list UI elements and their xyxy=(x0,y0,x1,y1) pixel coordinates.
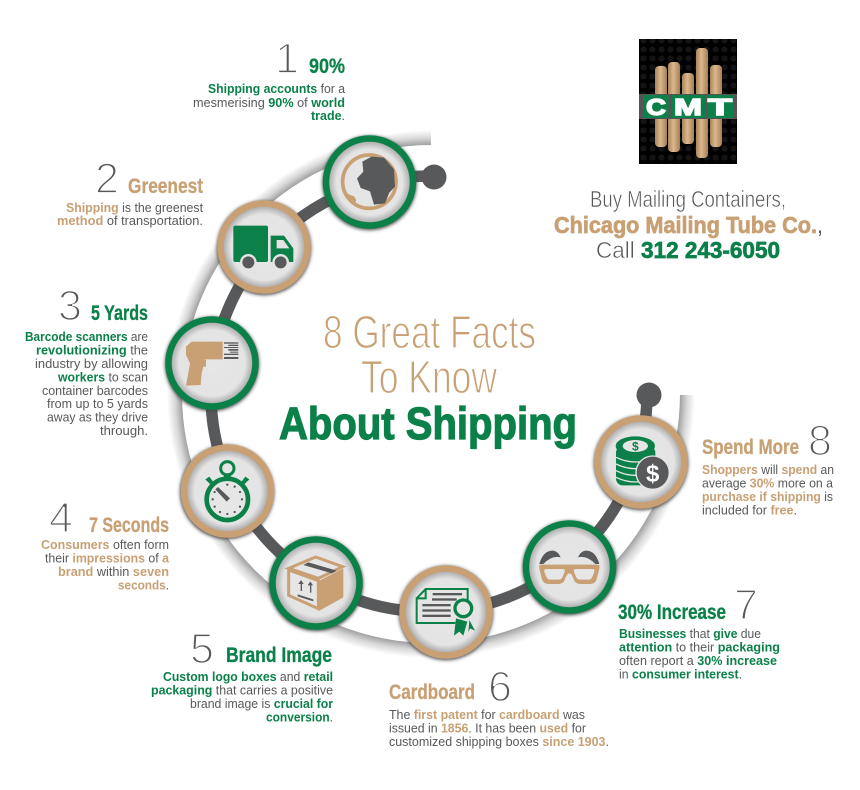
body text: purchase if shipping is xyxy=(702,489,833,504)
contact text xyxy=(554,186,823,263)
body text: brand image is crucial for xyxy=(190,696,333,711)
icon: coins xyxy=(616,436,670,490)
fact 7: 30% Increase xyxy=(618,581,780,682)
logo letters xyxy=(646,94,732,120)
icon: truck xyxy=(233,226,293,271)
body text xyxy=(151,669,333,724)
body text: in consumer interest. xyxy=(619,666,742,682)
body text: brand within seven xyxy=(58,564,169,579)
timeline arc with end knobs xyxy=(211,164,661,612)
curved white band with shadow xyxy=(167,130,695,658)
icon badge 8: coins xyxy=(594,416,688,510)
number 6: 6 xyxy=(488,663,512,711)
contact line 2: Chicago Mailing Tube Co., xyxy=(554,212,823,238)
body text: mesmerising 90% of world xyxy=(193,95,345,110)
icon: glasses xyxy=(539,551,599,584)
fact 6: Cardboard xyxy=(389,663,609,749)
number 8: 8 xyxy=(808,417,832,465)
body text: often report a 30% increase xyxy=(619,653,777,668)
heading: Spend More xyxy=(702,436,799,459)
fact 5: Brand Image xyxy=(151,625,333,724)
title line 3: About Shipping xyxy=(279,398,577,449)
body text xyxy=(619,626,780,682)
body text: Shipping accounts for a xyxy=(208,81,346,96)
body text: included for free. xyxy=(702,502,797,518)
body text xyxy=(389,707,609,749)
body text xyxy=(25,329,148,438)
heading: 5 Yards xyxy=(91,302,148,325)
body text xyxy=(193,81,346,123)
heading: Greenest xyxy=(128,175,203,198)
body text: issued in 1856. It has been used for xyxy=(389,720,587,736)
gray coin dollar sign: $ xyxy=(646,460,659,487)
icon badge 4: stopwatch xyxy=(180,445,274,539)
logo letters: T xyxy=(708,94,732,120)
number 2: 2 xyxy=(95,155,119,203)
icon badge 1: globe xyxy=(322,136,416,230)
body text: trade. xyxy=(311,108,345,123)
body text: customized shipping boxes since 1903. xyxy=(389,734,609,749)
icon: stopwatch xyxy=(205,462,249,520)
body text: method of transportation. xyxy=(57,213,203,228)
title line 1: 8 Great Facts xyxy=(323,306,536,358)
number 7: 7 xyxy=(734,581,758,629)
body text: container barcodes xyxy=(42,383,148,398)
body text: attention to their packaging xyxy=(619,640,780,654)
heading: Brand Image xyxy=(226,644,332,667)
icon badge 7: glasses xyxy=(522,521,616,615)
contact line 3: Call 312 243-6050 xyxy=(596,237,780,263)
icon badge 5: box xyxy=(269,537,363,631)
body text xyxy=(41,537,170,592)
icon: globe xyxy=(343,155,396,208)
heading: 7 Seconds xyxy=(89,514,169,537)
body text: away as they drive xyxy=(47,410,148,425)
fact 4: 7 Seconds xyxy=(41,494,170,592)
body text: Custom logo boxes and retail xyxy=(163,669,333,684)
body text: Barcode scanners are xyxy=(25,329,148,344)
icon: scanner xyxy=(186,342,238,386)
body text: Shipping is the greenest xyxy=(66,200,203,215)
coin dollar sign: $ xyxy=(632,439,639,453)
body text: Consumers often form xyxy=(41,537,169,552)
heading: 90% xyxy=(309,55,345,78)
icon badge 6: certificate xyxy=(399,566,493,660)
number 3: 3 xyxy=(58,282,82,330)
body text: Shoppers will spend an xyxy=(702,462,834,477)
title xyxy=(279,306,577,449)
icon badge 3: barcode scanner xyxy=(165,317,259,411)
body text: conversion. xyxy=(266,710,333,724)
fact 2: Greenest xyxy=(57,155,203,228)
contact line 1: Buy Mailing Containers, xyxy=(590,186,786,212)
icon badge 2: truck xyxy=(217,201,311,295)
body text xyxy=(57,200,203,228)
body text: revolutionizing the xyxy=(36,342,148,358)
body text xyxy=(702,462,834,518)
fact 1: 90% xyxy=(193,35,346,123)
body text: their impressions of a xyxy=(45,551,170,566)
body text: through. xyxy=(100,423,148,438)
body text: seconds. xyxy=(118,578,169,592)
body text: Businesses that give due xyxy=(619,626,761,641)
icon: certificate xyxy=(417,589,475,636)
logo letters: M xyxy=(674,94,702,120)
body text: packaging that carries a positive xyxy=(151,682,333,698)
logo: CMT xyxy=(639,39,737,164)
icon: box xyxy=(289,557,343,611)
heading: 30% Increase xyxy=(618,601,726,624)
heading: Cardboard xyxy=(389,681,475,704)
number 5: 5 xyxy=(190,625,214,673)
fact 8: Spend More xyxy=(702,417,834,518)
body text: industry by allowing xyxy=(35,356,148,371)
title line 2: To Know xyxy=(361,351,498,403)
body text: The first patent for cardboard was xyxy=(389,707,585,722)
body text: average 30% more on a xyxy=(702,476,834,490)
body text: from up to 5 yards xyxy=(47,396,148,411)
body text: workers to scan xyxy=(57,369,148,384)
fact 3: 5 Yards xyxy=(25,282,148,438)
logo letters: C xyxy=(646,94,666,120)
tubes xyxy=(655,48,722,158)
number 1: 1 xyxy=(275,35,299,83)
number 4: 4 xyxy=(49,494,73,542)
